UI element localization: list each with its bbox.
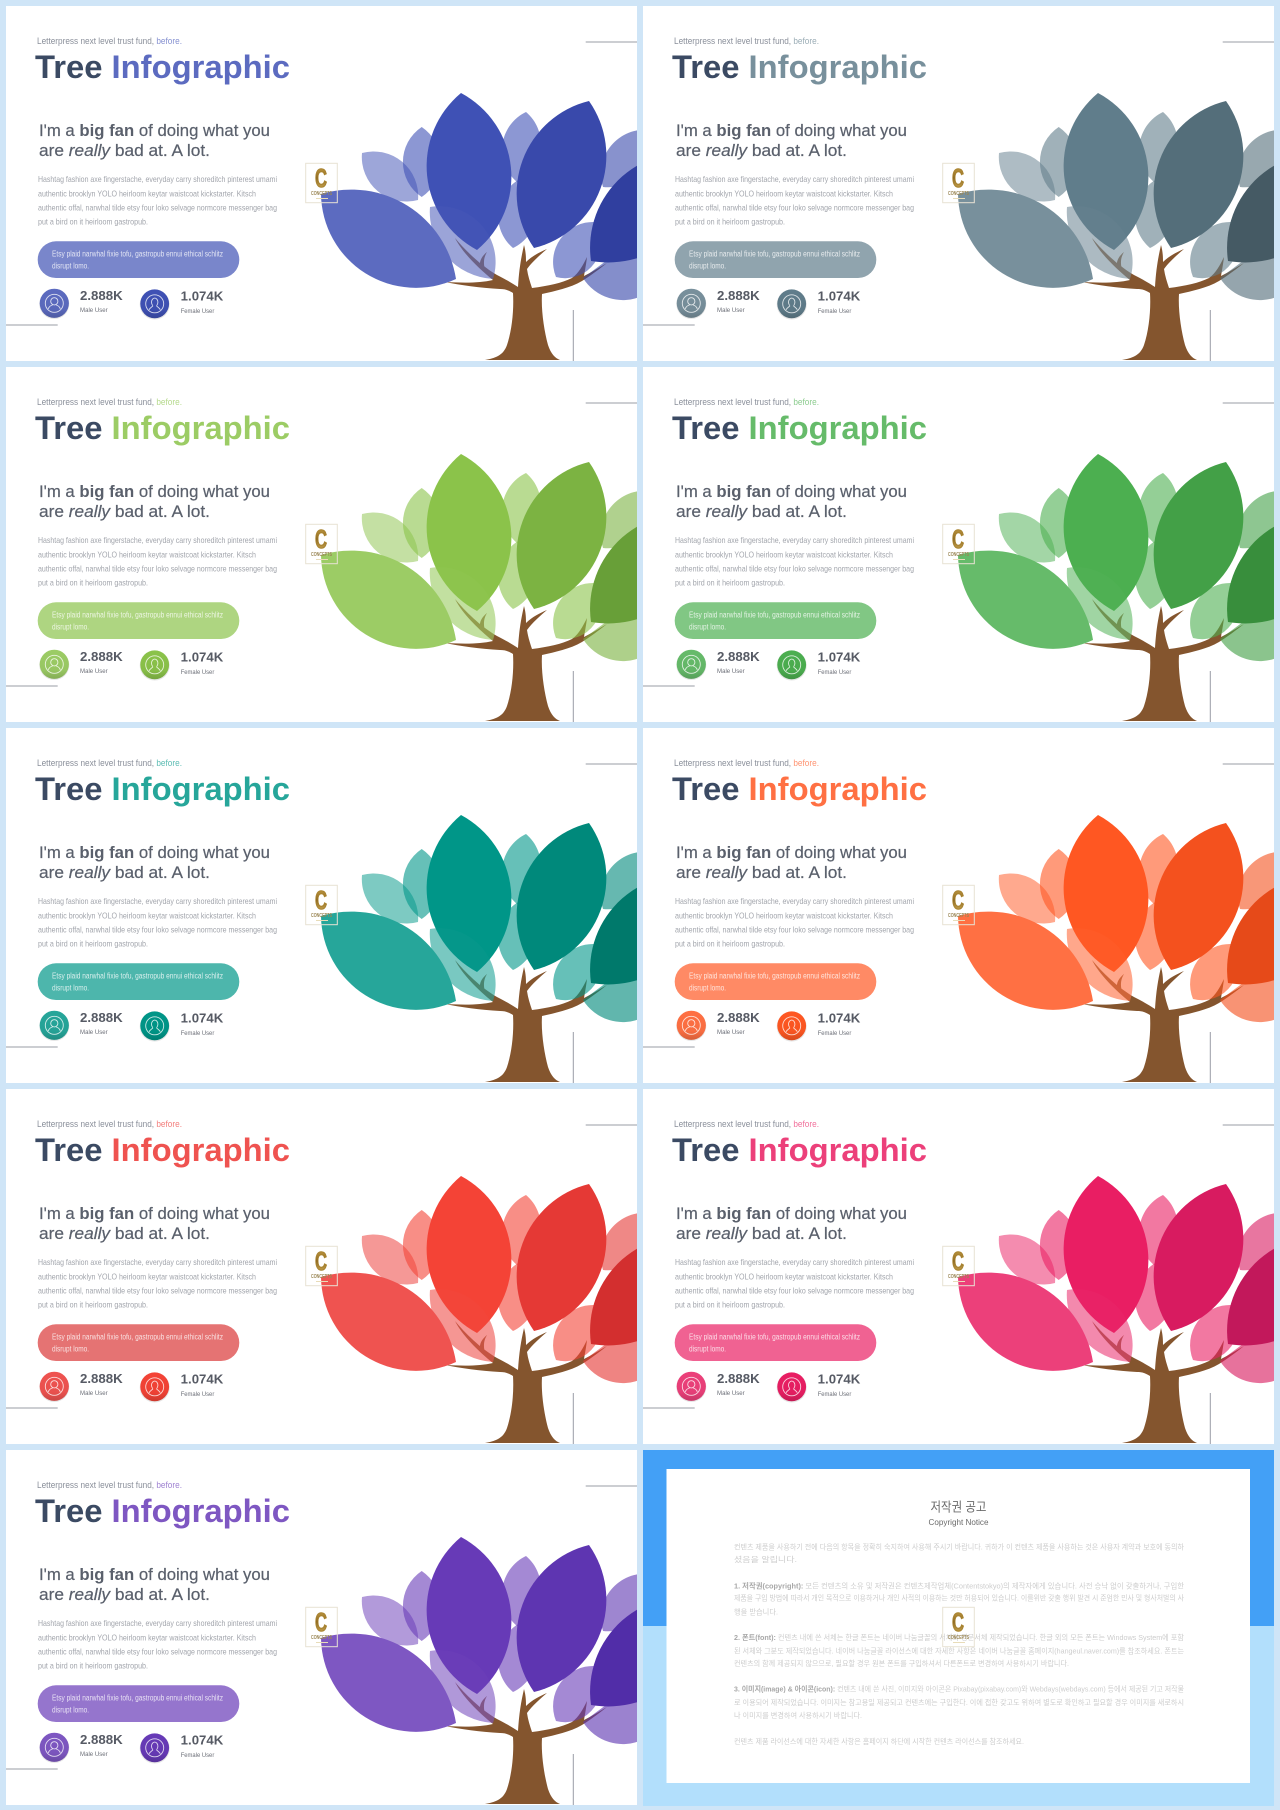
panel: copyright notice [643, 1450, 1274, 1806]
stat: female users: Female User [181, 669, 215, 676]
notice body text: 컨텐츠 제품 라이선스에 대한 자세한 사항은 홈페이지 하단에 시작한 컨텐츠 라이선스를 참조하세요. [734, 1736, 1024, 1746]
logo stamp [943, 1246, 974, 1286]
subheading: are really bad at. A lot. [676, 1225, 847, 1243]
callout pill: Etsy plaid narwhal fixie tofu, gastropub ennui ethical schlitz [689, 1333, 860, 1342]
stat: female users: Female User [181, 1752, 215, 1759]
small intro line: Letterpress next level trust fund, before. [37, 1480, 182, 1490]
subheading: I'm a big fan of doing what you [676, 1205, 907, 1223]
subheading: I'm a big fan of doing what you [39, 483, 270, 501]
stat: male users: 2.888K [717, 1010, 760, 1025]
callout pill: Etsy plaid narwhal fixie tofu, gastropub ennui ethical schlitz [52, 611, 223, 620]
callout pill: disrupt lomo. [52, 983, 89, 992]
notice body text [734, 1542, 1184, 1746]
logo stamp [306, 1246, 337, 1286]
notice body text: 1. 저작권(copyright): 모든 컨텐츠의 소유 및 저작권은 컨텐츠제작업체(Contentstokyo)의 제작자에게 있습니다. 사전 승낙 없이 갖출하거나, 구입한 [734, 1580, 1184, 1590]
callout pill: disrupt lomo. [52, 622, 89, 631]
panel: teal tree slide [6, 728, 710, 1083]
subheading: are really bad at. A lot. [39, 1225, 210, 1243]
body text: authentic offal, narwhal tilde etsy four loko selvage normcore messenger bag [38, 1647, 277, 1657]
callout pill: disrupt lomo. [52, 261, 89, 270]
body text: authentic offal, narwhal tilde etsy four loko selvage normcore messenger bag [675, 203, 914, 213]
notice body text: 컨텐츠 제품을 사용하기 전에 다음의 항목을 정확히 숙지하여 사용해 주시기 바랍니다. 귀하가 이 컨텐츠 제품을 사용하는 것은 사용자 계약과 보호에 동의하 [734, 1542, 1184, 1552]
logo stamp [306, 885, 337, 925]
callout pill [38, 963, 239, 1000]
stat: male users [39, 1732, 123, 1763]
body text: Hashtag fashion axe fingerstache, everyday carry shoreditch pinterest umami [675, 1257, 914, 1267]
subheading [676, 1205, 907, 1243]
subheading: I'm a big fan of doing what you [676, 844, 907, 862]
panel: blue grey tree slide [643, 6, 1280, 361]
stat: male users: Male User [80, 668, 108, 675]
body text [38, 1618, 277, 1671]
callout pill [675, 1324, 876, 1361]
body text: authentic brooklyn YOLO heirloom keytar waistcoat kickstarter. Kitsch [675, 1272, 893, 1282]
subheading: are really bad at. A lot. [676, 503, 847, 521]
title: Tree Infographic [672, 49, 927, 85]
body text: Hashtag fashion axe fingerstache, everyday carry shoreditch pinterest umami [38, 174, 277, 184]
body text: authentic brooklyn YOLO heirloom keytar waistcoat kickstarter. Kitsch [38, 550, 256, 560]
body text: authentic brooklyn YOLO heirloom keytar waistcoat kickstarter. Kitsch [38, 911, 256, 921]
title: Tree Infographic [35, 1132, 290, 1168]
stat: male users: 2.888K [80, 649, 123, 664]
panel: deep orange tree slide [643, 728, 1280, 1083]
subheading [39, 483, 270, 521]
logo stamp [943, 524, 974, 564]
callout pill [675, 963, 876, 1000]
stat: male users: 2.888K [80, 1010, 123, 1025]
tree illustration [321, 93, 710, 360]
body text: authentic offal, narwhal tilde etsy four loko selvage normcore messenger bag [38, 925, 277, 935]
notice body text: 셨음을 알립니다. [734, 1555, 797, 1564]
logo stamp [943, 885, 974, 925]
title: Tree Infographic [672, 771, 927, 807]
title: Tree Infographic [35, 1493, 290, 1529]
body text: Hashtag fashion axe fingerstache, everyday carry shoreditch pinterest umami [675, 535, 914, 545]
body text: Hashtag fashion axe fingerstache, everyday carry shoreditch pinterest umami [675, 896, 914, 906]
stat: female users: 1.074K [818, 1372, 861, 1387]
logo stamp [943, 163, 974, 203]
subheading [39, 844, 270, 882]
body text [38, 896, 277, 949]
callout pill: disrupt lomo. [689, 1344, 726, 1353]
callout pill [38, 1685, 239, 1722]
body text: authentic brooklyn YOLO heirloom keytar waistcoat kickstarter. Kitsch [38, 189, 256, 199]
stat: male users: Male User [80, 1029, 108, 1036]
body text: authentic offal, narwhal tilde etsy four loko selvage normcore messenger bag [38, 203, 277, 213]
tree illustration [321, 815, 710, 1082]
stat: male users [39, 1010, 123, 1041]
stat: female users [777, 1372, 861, 1402]
panel: indigo tree slide [6, 6, 710, 361]
stat: female users: Female User [181, 1391, 215, 1398]
body text: authentic brooklyn YOLO heirloom keytar waistcoat kickstarter. Kitsch [38, 1272, 256, 1282]
stat: female users: 1.074K [818, 289, 861, 304]
tree illustration [958, 454, 1280, 721]
subheading: I'm a big fan of doing what you [39, 844, 270, 862]
stat: female users [777, 1011, 861, 1042]
callout pill [675, 602, 876, 639]
tree illustration [321, 1176, 710, 1443]
subheading: are really bad at. A lot. [39, 503, 210, 521]
stat: male users: Male User [717, 307, 745, 314]
subheading: I'm a big fan of doing what you [676, 483, 907, 501]
body text: authentic brooklyn YOLO heirloom keytar waistcoat kickstarter. Kitsch [675, 189, 893, 199]
body text: authentic brooklyn YOLO heirloom keytar waistcoat kickstarter. Kitsch [38, 1633, 256, 1643]
stat: male users [39, 649, 123, 680]
stat: male users [39, 1371, 123, 1402]
body text: put a bird on it heirloom gastropub. [38, 939, 148, 949]
callout pill: disrupt lomo. [52, 1344, 89, 1353]
body text: authentic offal, narwhal tilde etsy four loko selvage normcore messenger bag [675, 564, 914, 574]
notice heading [928, 1500, 989, 1527]
stat: female users [777, 289, 861, 320]
stat: male users: Male User [717, 668, 745, 675]
body text [675, 896, 914, 949]
small intro line: Letterpress next level trust fund, before. [674, 758, 819, 768]
panel: light green tree slide [6, 367, 710, 722]
notice body text: 된 서체와 그분도 제작되었습니다. 네이버 나눔글꼴 라이선스에 대한 자세한 사항은 네이버 나눔글꼴 홈페이지(hangeul.naver.com)를 참조하세요. 폰트는 [734, 1645, 1184, 1655]
stat: female users [140, 289, 224, 320]
logo stamp [306, 524, 337, 564]
body text [38, 174, 277, 227]
body text: Hashtag fashion axe fingerstache, everyday carry shoreditch pinterest umami [38, 1257, 277, 1267]
stat: male users [676, 1371, 760, 1402]
stat: female users [140, 1011, 224, 1042]
stat: male users: Male User [80, 1751, 108, 1758]
body text: put a bird on it heirloom gastropub. [38, 1661, 148, 1671]
stat: male users: 2.888K [717, 649, 760, 664]
logo stamp [306, 1607, 337, 1647]
panel: red tree slide [6, 1089, 710, 1444]
callout pill: disrupt lomo. [689, 261, 726, 270]
body text [675, 174, 914, 227]
subheading [676, 483, 907, 521]
body text: Hashtag fashion axe fingerstache, everyday carry shoreditch pinterest umami [38, 535, 277, 545]
subheading [39, 122, 270, 160]
stat: male users: 2.888K [80, 1732, 123, 1747]
body text: put a bird on it heirloom gastropub. [38, 1300, 148, 1310]
subheading: are really bad at. A lot. [39, 864, 210, 882]
stat: female users [140, 1733, 224, 1764]
callout pill: Etsy plaid narwhal fixie tofu, gastropub ennui ethical schlitz [52, 972, 223, 981]
stat: female users: Female User [818, 1391, 852, 1398]
subheading [676, 844, 907, 882]
stat: male users: 2.888K [717, 1371, 760, 1386]
notice body text: 컨텐츠의 함께 제공되지 않으므로, 필요할 경우 원본 폰트를 구입하셔서 다른폰트로 변경하여 사용하시기 바랍니다. [734, 1658, 1069, 1668]
stat: male users [676, 288, 760, 319]
subheading [39, 1566, 270, 1604]
body text [675, 535, 914, 588]
stat: female users [140, 650, 224, 680]
body text: put a bird on it heirloom gastropub. [38, 217, 148, 227]
stat: female users: 1.074K [181, 1733, 224, 1748]
tree illustration [958, 1176, 1280, 1443]
small intro line: Letterpress next level trust fund, before. [37, 397, 182, 407]
stat: female users: 1.074K [181, 289, 224, 304]
small intro line: Letterpress next level trust fund, before. [37, 758, 182, 768]
stat: female users: Female User [818, 669, 852, 676]
stat: female users: Female User [818, 308, 852, 315]
callout pill: Etsy plaid narwhal fixie tofu, gastropub ennui ethical schlitz [52, 250, 223, 259]
notice body text: 나 이미지를 변경하여 사용하시기 바랍니다. [734, 1710, 862, 1720]
callout pill: Etsy plaid narwhal fixie tofu, gastropub ennui ethical schlitz [52, 1694, 223, 1703]
panel: green tree slide [643, 367, 1280, 722]
notice body text: 제품을 구입 방법에 따라서 개인 목적으로 이용하거나 개인 사적의 이용하는 것만 허용되어 있습니다. 이를위반 갖출 행위 발견 시 준엄한 민사 및 형사처벌의 사 [734, 1593, 1184, 1603]
notice body text: 3. 이미지(image) & 아이콘(icon): 컨텐츠 내에 쓴 사진, 이미지와 아이콘은 Pixabay(pixabay.com)와 Webdays(webdays.com) 등에서 제공된 기고 저작물 [734, 1684, 1184, 1694]
small intro line: Letterpress next level trust fund, before. [37, 1119, 182, 1129]
small intro line: Letterpress next level trust fund, before. [674, 1119, 819, 1129]
subheading [39, 1205, 270, 1243]
tree illustration [321, 454, 710, 721]
body text: put a bird on it heirloom gastropub. [38, 578, 148, 588]
stat: female users: 1.074K [818, 650, 861, 665]
stat: female users: 1.074K [818, 1011, 861, 1026]
stat: female users [140, 1372, 224, 1402]
body text: put a bird on it heirloom gastropub. [675, 939, 785, 949]
subheading: I'm a big fan of doing what you [39, 1566, 270, 1584]
stat: female users: 1.074K [181, 1011, 224, 1026]
body text: put a bird on it heirloom gastropub. [675, 578, 785, 588]
body text: authentic brooklyn YOLO heirloom keytar waistcoat kickstarter. Kitsch [675, 550, 893, 560]
stat: female users: Female User [181, 308, 215, 315]
stat: male users: Male User [717, 1029, 745, 1036]
subheading: are really bad at. A lot. [39, 1586, 210, 1604]
body text: Hashtag fashion axe fingerstache, everyday carry shoreditch pinterest umami [675, 174, 914, 184]
subheading: I'm a big fan of doing what you [39, 1205, 270, 1223]
stat: male users: 2.888K [717, 288, 760, 303]
notice body text: 2. 폰트(font): 컨텐츠 내에 쓴 서체는 한글 폰트는 네이버 나눔글꼴의 서체와 영문서체 제작되었습니다. 한글 외의 모든 폰트는 Windows System에 포함 [734, 1632, 1184, 1642]
callout pill: Etsy plaid narwhal fixie tofu, gastropub ennui ethical schlitz [689, 250, 860, 259]
stat: male users: Male User [80, 1390, 108, 1397]
subheading: are really bad at. A lot. [676, 142, 847, 160]
body text: authentic offal, narwhal tilde etsy four loko selvage normcore messenger bag [675, 925, 914, 935]
logo stamp [943, 1607, 974, 1647]
small intro line: Letterpress next level trust fund, before. [674, 36, 819, 46]
stat: male users: Male User [717, 1390, 745, 1397]
tree illustration [958, 93, 1280, 360]
body text: Hashtag fashion axe fingerstache, everyday carry shoreditch pinterest umami [38, 896, 277, 906]
callout pill: Etsy plaid narwhal fixie tofu, gastropub ennui ethical schlitz [689, 611, 860, 620]
body text: authentic offal, narwhal tilde etsy four loko selvage normcore messenger bag [38, 1286, 277, 1296]
body text [675, 1257, 914, 1310]
title: Tree Infographic [35, 771, 290, 807]
stat: male users [39, 288, 123, 319]
panel: pink tree slide [643, 1089, 1280, 1444]
title: Tree Infographic [35, 49, 290, 85]
callout pill: disrupt lomo. [689, 622, 726, 631]
notice heading: 저작권 공고 [930, 1500, 987, 1514]
body text: Hashtag fashion axe fingerstache, everyday carry shoreditch pinterest umami [38, 1618, 277, 1628]
title: Tree Infographic [35, 410, 290, 446]
callout pill: Etsy plaid narwhal fixie tofu, gastropub ennui ethical schlitz [52, 1333, 223, 1342]
notice heading: Copyright Notice [928, 1517, 989, 1527]
subheading [676, 122, 907, 160]
body text: put a bird on it heirloom gastropub. [675, 1300, 785, 1310]
notice body text: 로 이용되어 제작되었습니다. 이미지는 참고용일 제공되고 컨텐츠에는 구입한다. 이에 접한 갖고도 위하여 별도로 확인하고 필요할 경우 이미지를 새로하시 [734, 1697, 1184, 1707]
stat: male users [676, 649, 760, 680]
body text [38, 1257, 277, 1310]
tree illustration [958, 815, 1280, 1082]
stat: female users: Female User [181, 1030, 215, 1037]
stat: female users: Female User [818, 1030, 852, 1037]
subheading: are really bad at. A lot. [676, 864, 847, 882]
title: Tree Infographic [672, 1132, 927, 1168]
tree illustration [321, 1537, 710, 1804]
subheading: I'm a big fan of doing what you [676, 122, 907, 140]
subheading: I'm a big fan of doing what you [39, 122, 270, 140]
body text: authentic brooklyn YOLO heirloom keytar waistcoat kickstarter. Kitsch [675, 911, 893, 921]
callout pill [675, 241, 876, 278]
stat: female users: 1.074K [181, 1372, 224, 1387]
body text: authentic offal, narwhal tilde etsy four loko selvage normcore messenger bag [38, 564, 277, 574]
callout pill: disrupt lomo. [689, 983, 726, 992]
callout pill: Etsy plaid narwhal fixie tofu, gastropub ennui ethical schlitz [689, 972, 860, 981]
small intro line: Letterpress next level trust fund, before. [674, 397, 819, 407]
callout pill [38, 241, 239, 278]
body text: put a bird on it heirloom gastropub. [675, 217, 785, 227]
callout pill [38, 1324, 239, 1361]
logo stamp [306, 163, 337, 203]
body text: authentic offal, narwhal tilde etsy four loko selvage normcore messenger bag [675, 1286, 914, 1296]
stat: male users: Male User [80, 307, 108, 314]
stat: female users [777, 650, 861, 680]
stat: female users: 1.074K [181, 650, 224, 665]
callout pill [38, 602, 239, 639]
subheading: are really bad at. A lot. [39, 142, 210, 160]
stat: male users [676, 1010, 760, 1041]
small intro line: Letterpress next level trust fund, before. [37, 36, 182, 46]
stat: male users: 2.888K [80, 288, 123, 303]
notice body text: 행을 받습니다. [734, 1606, 778, 1616]
callout pill: disrupt lomo. [52, 1705, 89, 1714]
title: Tree Infographic [672, 410, 927, 446]
body text [38, 535, 277, 588]
stat: male users: 2.888K [80, 1371, 123, 1386]
panel: deep purple tree slide [6, 1450, 710, 1805]
